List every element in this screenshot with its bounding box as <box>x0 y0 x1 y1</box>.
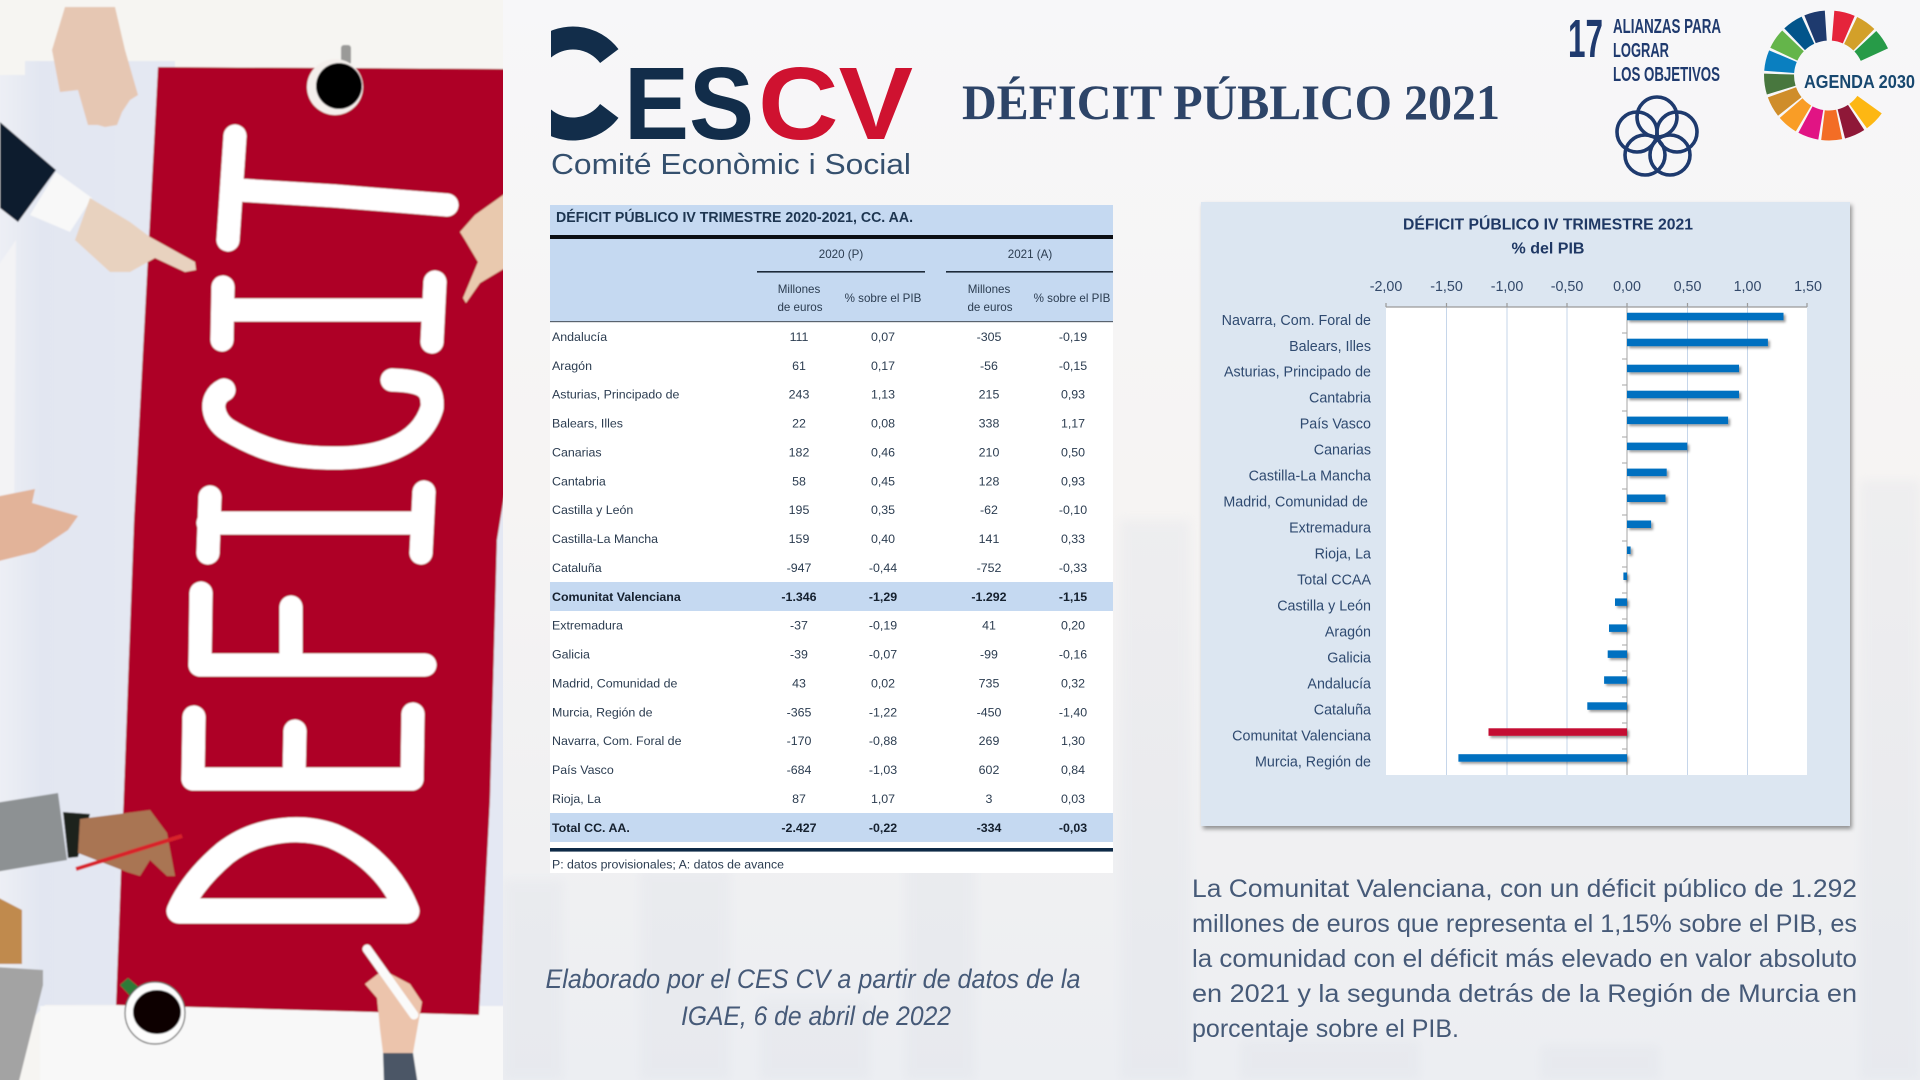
value axis: 1,00 <box>1734 279 1761 295</box>
table rows: -0,07 <box>869 648 897 662</box>
table rows: 602 <box>979 763 999 777</box>
category labels: Balears, Illes <box>1289 339 1371 355</box>
hand left middle <box>0 489 78 562</box>
table rows: Aragón <box>552 359 592 373</box>
SDG 17 heading: ALIANZAS PARA <box>1613 15 1721 38</box>
table rows: 3 <box>986 792 993 806</box>
table rows: -39 <box>790 648 808 662</box>
table rows: -450 <box>977 705 1002 719</box>
table header band: 2021 (A) <box>1008 248 1052 261</box>
category labels: Cantabria <box>1309 391 1371 407</box>
table rows: -1.346 <box>781 590 817 604</box>
SDG 17 heading: 17 <box>1568 9 1603 69</box>
table rows: -0,88 <box>869 734 897 748</box>
table rows: -365 <box>787 705 812 719</box>
category labels: Canarias <box>1314 443 1371 459</box>
category labels: Rioja, La <box>1315 546 1371 562</box>
logo: CES CV: CV <box>758 46 913 161</box>
table rows: -1,15 <box>1059 590 1087 604</box>
table rows: Asturias, Principado de <box>552 388 680 402</box>
table header band: Millones <box>778 283 820 296</box>
table rows: 1,13 <box>871 388 895 402</box>
table rows: 0,03 <box>1061 792 1085 806</box>
value axis: -1,00 <box>1491 279 1523 295</box>
text block: summary paragraph: la comunidad con el déficit más elevado en valor absoluto <box>1192 945 1857 973</box>
table rows: 338 <box>979 417 999 431</box>
SDG 17 heading: LOGRAR <box>1613 39 1669 62</box>
table rows: 43 <box>792 676 806 690</box>
table rows: 141 <box>979 532 999 546</box>
table rows: 0,35 <box>871 503 895 517</box>
table rows: Navarra, Com. Foral de <box>552 734 682 748</box>
table rows: 128 <box>979 474 999 488</box>
table rows: Castilla-La Mancha <box>552 532 658 546</box>
table rows: 0,84 <box>1061 763 1085 777</box>
text block: summary paragraph: porcentaje sobre el PIB. <box>1192 1015 1459 1043</box>
table rows: Rioja, La <box>552 792 601 806</box>
text block: summary paragraph <box>1192 875 1857 1043</box>
banner lettering: DEFICIT painted word <box>179 136 447 911</box>
table rows: 0,32 <box>1061 676 1085 690</box>
table rows: -752 <box>977 561 1002 575</box>
table rows: -2.427 <box>781 821 817 835</box>
coffee cup top <box>307 45 363 115</box>
table rows: -334 <box>977 821 1002 835</box>
table rows: 1,07 <box>871 792 895 806</box>
table rows: -1,03 <box>869 763 897 777</box>
table rows: Castilla y León <box>552 503 633 517</box>
table rows: -947 <box>787 561 812 575</box>
logo: CES CV <box>527 38 913 181</box>
table rows: 0,33 <box>1061 532 1085 546</box>
coffee cup bottom <box>120 978 185 1044</box>
table rows: 0,07 <box>871 330 895 344</box>
table rows: -0,10 <box>1059 503 1087 517</box>
table footnote: P: datos provisionales; A: datos de avance <box>552 858 784 872</box>
table rows: -0,16 <box>1059 648 1087 662</box>
logo: CES CV: Comité Econòmic i Social <box>551 149 911 181</box>
table rows: -0,19 <box>1059 330 1087 344</box>
photo: hands pointing at DEFICIT banner <box>0 0 510 1080</box>
category labels: Murcia, Región de <box>1255 754 1371 770</box>
plot area <box>1386 307 1807 775</box>
category labels: Andalucía <box>1307 676 1371 692</box>
table header band: DÉFICIT PÚBLICO IV TRIMESTRE 2020-2021, CC. AA. <box>556 208 913 226</box>
table rows: País Vasco <box>552 763 614 777</box>
table rows: 0,08 <box>871 417 895 431</box>
text block: summary paragraph: en 2021 y la segunda detrás de la Región de Murcia en <box>1192 980 1857 1008</box>
table rows: Cantabria <box>552 474 606 488</box>
table rows: 195 <box>789 503 809 517</box>
category labels: Navarra, Com. Foral de <box>1222 313 1371 329</box>
table rows: 0,93 <box>1061 388 1085 402</box>
SDG 17 heading <box>1568 9 1721 86</box>
table rows: 111 <box>790 330 809 344</box>
table rows: Canarias <box>552 446 602 460</box>
table header band <box>550 205 1113 322</box>
value axis: -1,50 <box>1430 279 1463 295</box>
category labels: Extremadura <box>1289 521 1371 537</box>
bars <box>1458 313 1784 762</box>
panel: bar chart <box>1201 202 1850 826</box>
table rows: 1,17 <box>1061 417 1085 431</box>
table rows: -0,33 <box>1059 561 1087 575</box>
category labels: Galicia <box>1327 650 1371 666</box>
table rows: 0,45 <box>871 474 895 488</box>
table rows: 61 <box>792 359 806 373</box>
wooden object and grey sleeve <box>0 896 43 1080</box>
table rows: -0,19 <box>869 619 897 633</box>
table rows: 0,46 <box>871 446 895 460</box>
table rows <box>552 330 1087 835</box>
table rows: 0,40 <box>871 532 895 546</box>
table rows: 87 <box>792 792 806 806</box>
logo: CES CV: ES <box>624 46 754 161</box>
table rows: -0,44 <box>869 561 897 575</box>
table header band: Millones <box>968 283 1010 296</box>
category labels: Asturias, Principado de <box>1224 365 1371 381</box>
SDG 17 heading: LOS OBJETIVOS <box>1613 63 1720 86</box>
title: DÉFICIT PÚBLICO 2021 <box>962 74 1500 130</box>
table rows: -1,40 <box>1059 705 1087 719</box>
table rows: -99 <box>980 648 998 662</box>
table rows: -1,22 <box>869 705 897 719</box>
table rows: -56 <box>980 359 998 373</box>
table header band: % sobre el PIB <box>1034 292 1111 305</box>
table rows: -0,03 <box>1059 821 1087 835</box>
table rows: 22 <box>792 417 806 431</box>
table rows: -0,15 <box>1059 359 1087 373</box>
table rows: 735 <box>979 676 999 690</box>
icon: Agenda 2030 wheel <box>1763 10 1915 141</box>
category labels: Total CCAA <box>1297 572 1371 588</box>
table rows: Murcia, Región de <box>552 705 653 719</box>
table rows: -170 <box>787 734 812 748</box>
hand pointing left arm <box>0 122 196 272</box>
table header band: % sobre el PIB <box>845 292 922 305</box>
table rows: 243 <box>789 388 809 402</box>
table rows: -62 <box>980 503 998 517</box>
table rows: Balears, Illes <box>552 417 623 431</box>
table rows: -305 <box>977 330 1002 344</box>
source note <box>546 964 1080 1031</box>
icon: SDG 17 flower of rings <box>1617 97 1697 175</box>
hand top <box>52 7 138 127</box>
table rows: 0,50 <box>1061 446 1085 460</box>
table rows: 210 <box>979 446 999 460</box>
table rows: Madrid, Comunidad de <box>552 676 677 690</box>
table rows: -0,22 <box>869 821 897 835</box>
table rows: -37 <box>790 619 808 633</box>
category labels: Castilla-La Mancha <box>1249 469 1371 485</box>
arm with pencil <box>0 793 182 876</box>
panel: data table <box>550 205 1113 873</box>
table header band: 2020 (P) <box>819 248 863 261</box>
value axis: 0,00 <box>1613 279 1641 295</box>
chart title: % del PIB <box>1512 240 1584 258</box>
table rows: -684 <box>787 763 812 777</box>
table rows: -1.292 <box>971 590 1007 604</box>
table rows: Comunitat Valenciana <box>552 590 681 604</box>
chart title <box>1403 214 1693 258</box>
table rows: Extremadura <box>552 619 623 633</box>
table rows: 41 <box>982 619 996 633</box>
value axis <box>1370 279 1822 307</box>
table rows: 58 <box>792 474 806 488</box>
table header band: de euros <box>967 301 1013 314</box>
highlighted row backgrounds <box>550 582 1113 842</box>
table header band: de euros <box>777 301 823 314</box>
table rows: 0,02 <box>871 676 895 690</box>
category labels: Madrid, Comunidad de <box>1223 495 1368 511</box>
category labels: Cataluña <box>1314 702 1371 718</box>
category labels: Aragón <box>1325 624 1371 640</box>
value axis: -0,50 <box>1551 279 1583 295</box>
hand right <box>458 193 503 304</box>
table rows: 0,93 <box>1061 474 1085 488</box>
text block: summary paragraph: millones de euros que representa el 1,15% sobre el PIB, es <box>1192 910 1857 938</box>
red banner <box>116 67 510 1015</box>
table rows: 215 <box>979 388 999 402</box>
value axis: 0,50 <box>1674 279 1701 295</box>
table rows: 269 <box>979 734 999 748</box>
table rows: 0,17 <box>871 359 895 373</box>
table rows: 1,30 <box>1061 734 1085 748</box>
category labels: Comunitat Valenciana <box>1232 728 1371 744</box>
table rows: 0,20 <box>1061 619 1085 633</box>
source note: IGAE, 6 de abril de 2022 <box>681 1001 951 1031</box>
category labels <box>1222 313 1371 770</box>
text block: summary paragraph: La Comunitat Valenciana, con un déficit público de 1.292 <box>1192 875 1857 903</box>
table rows: 182 <box>789 446 809 460</box>
category labels: Castilla y León <box>1277 598 1371 614</box>
value axis: 1,50 <box>1794 279 1822 295</box>
table rows: Galicia <box>552 648 590 662</box>
table rows: Andalucía <box>552 330 607 344</box>
table rows: Cataluña <box>552 561 602 575</box>
table rows: Total CC. AA. <box>552 821 630 835</box>
hand with marker <box>365 949 422 1080</box>
value axis: -2,00 <box>1370 279 1402 295</box>
chart title: DÉFICIT PÚBLICO IV TRIMESTRE 2021 <box>1403 214 1693 234</box>
table rows: -1,29 <box>869 590 897 604</box>
table rows: 159 <box>789 532 809 546</box>
source note: Elaborado por el CES CV a partir de datos de la <box>546 964 1080 994</box>
category labels: País Vasco <box>1300 417 1371 433</box>
